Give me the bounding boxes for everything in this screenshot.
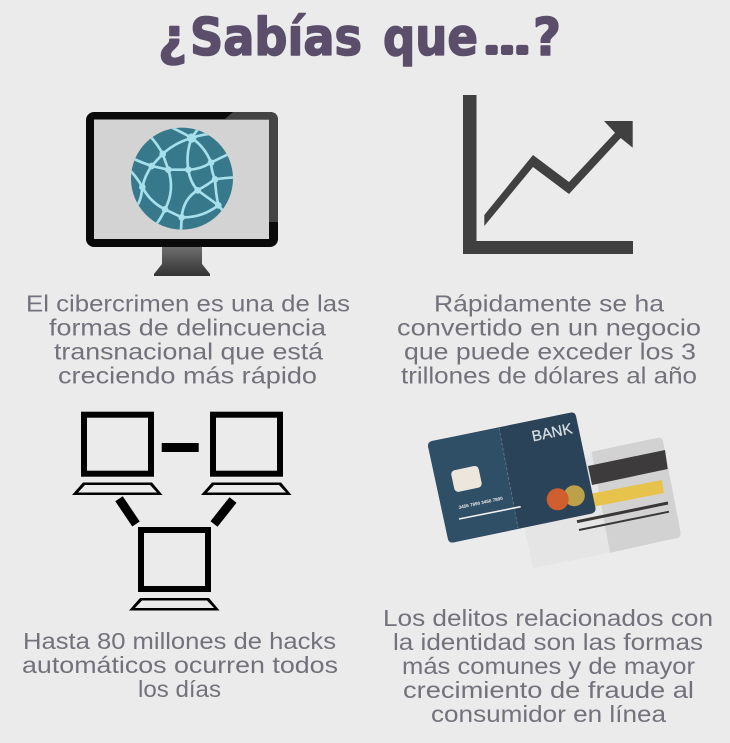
text: identity fraud: más comunes y de mayor — [402, 653, 695, 679]
title — [158, 8, 561, 68]
text: business: convertido en un negocio — [397, 314, 701, 340]
text: cybercrime: transnacional que está — [54, 338, 324, 364]
text: identity fraud: Los delitos relacionados con — [383, 605, 713, 631]
icon: bank cards: 3456 7890 3456 7890 — [458, 496, 504, 510]
title: Sabías — [190, 8, 362, 68]
text: business: Rápidamente se ha — [434, 290, 665, 316]
globe — [130, 126, 235, 230]
text: cybercrime: El cibercrimen es una de las — [26, 290, 350, 316]
title: ... — [484, 23, 530, 61]
text: business: que puede exceder los 3 — [404, 338, 696, 364]
icon: bank cards — [428, 412, 681, 568]
text: identity fraud: la identidad son las formas — [393, 629, 703, 655]
icon: monitor with globe — [86, 112, 278, 276]
text: hacks: Hasta 80 millones de hacks — [23, 628, 336, 654]
title: ¿ — [158, 8, 187, 68]
text: business — [397, 290, 701, 388]
title: ? — [533, 8, 561, 68]
text: identity fraud: crecimiento de fraude al — [403, 677, 694, 703]
text: hacks: los días — [138, 676, 221, 702]
text: cybercrime: creciendo más rápido — [58, 362, 317, 388]
text: hacks: automáticos ocurren todos — [22, 652, 338, 678]
text: cybercrime: formas de delincuencia — [49, 314, 327, 340]
text: cybercrime — [26, 290, 350, 388]
icon: growth chart — [463, 95, 633, 254]
text: business: trillones de dólares al año — [401, 362, 697, 388]
icon: networked laptops — [72, 415, 292, 610]
icon: bank cards: BANK — [530, 420, 574, 445]
text: hacks — [22, 628, 338, 702]
text: identity fraud: consumidor en línea — [431, 701, 667, 727]
text: identity fraud — [383, 605, 713, 727]
title: que — [383, 8, 478, 68]
